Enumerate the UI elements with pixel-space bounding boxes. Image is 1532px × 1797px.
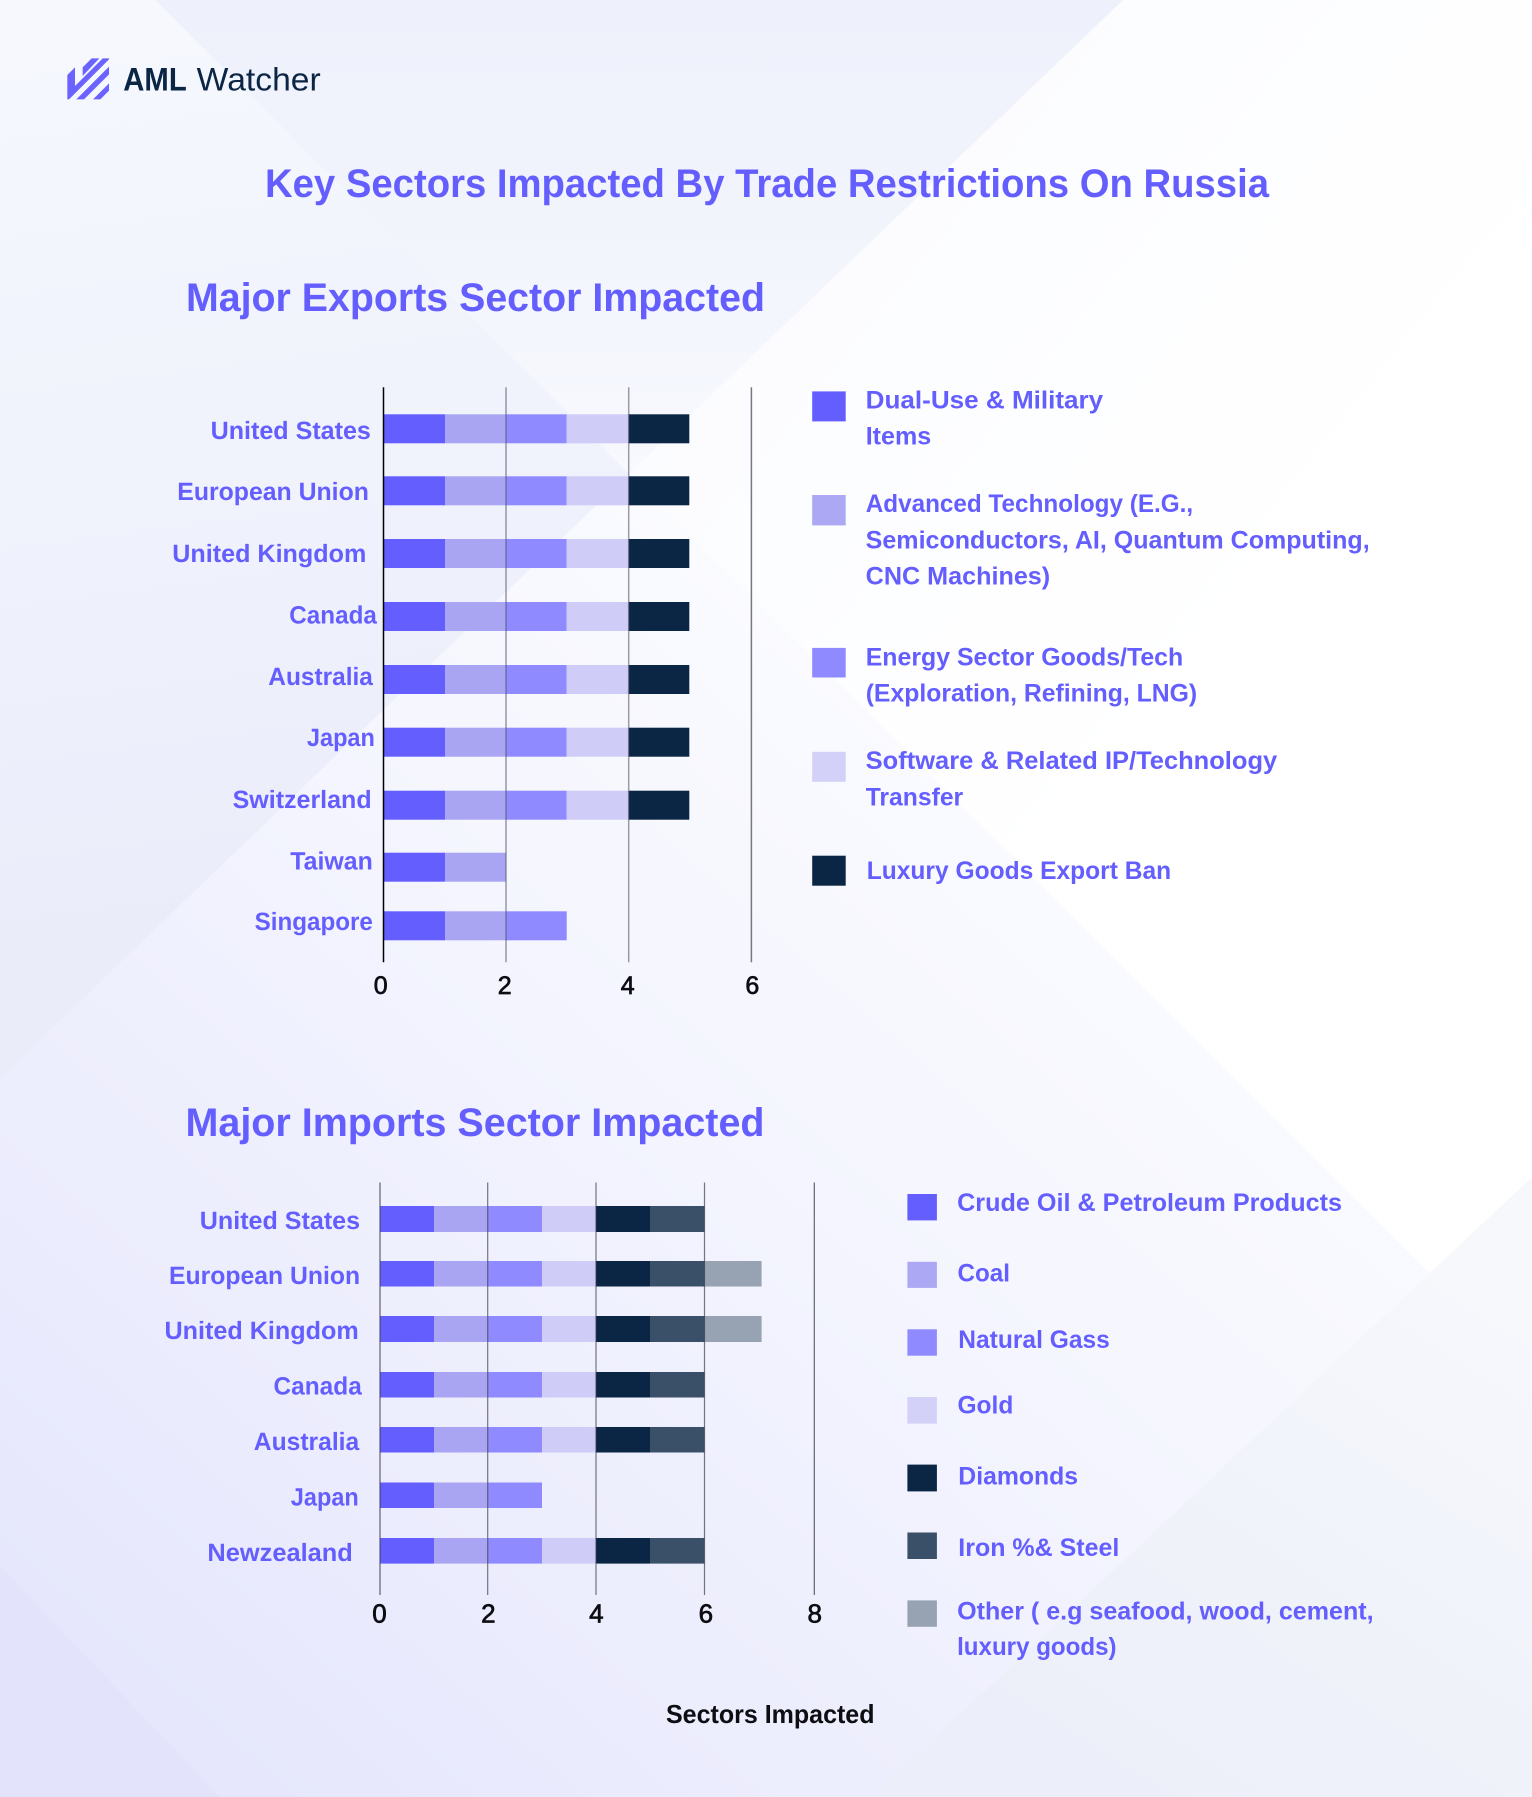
legend: imports: Coal <box>958 1259 1010 1287</box>
country labels: imports: United States <box>200 1207 360 1235</box>
legend: imports: Natural Gass <box>958 1326 1110 1354</box>
logo wordmark: Watcher <box>197 62 321 98</box>
logo: AML Watcher <box>67 58 321 99</box>
title: Key Sectors Impacted By Trade Restrictions On Russia <box>265 162 1270 206</box>
x axis ticks: exports: 0 <box>374 972 388 1000</box>
country labels: exports: United Kingdom <box>172 540 366 568</box>
logo wordmark: AML <box>123 62 187 98</box>
legend: exports: Advanced Technology (E.G., <box>866 490 1193 518</box>
legend: imports: Diamonds <box>958 1462 1078 1490</box>
country labels: exports: Japan <box>307 724 375 752</box>
country labels: exports: Singapore <box>255 908 373 936</box>
legend: exports: (Exploration, Refining, LNG) <box>866 680 1197 708</box>
country labels: imports: United Kingdom <box>164 1317 359 1345</box>
x axis ticks: exports: 2 <box>498 972 512 1000</box>
country labels: exports: United States <box>211 417 371 445</box>
legend: exports: Semiconductors, AI, Quantum Computing, <box>866 526 1370 554</box>
legend: exports: Dual-Use & Military <box>866 387 1103 415</box>
legend: imports: Iron %& Steel <box>958 1534 1119 1562</box>
x axis ticks: imports: 8 <box>807 1598 822 1628</box>
axis title: Sectors Impacted <box>666 1699 874 1729</box>
stacked bars: imports <box>380 1206 762 1564</box>
x axis ticks: imports: 4 <box>589 1598 604 1628</box>
country labels: exports <box>172 417 378 936</box>
legend: imports: Other ( e.g seafood, wood, cement, <box>957 1597 1374 1625</box>
legend: exports: Software & Related IP/Technology <box>866 747 1277 775</box>
legend: exports <box>812 387 1370 886</box>
x axis ticks: imports: 0 <box>372 1598 387 1628</box>
chart: exports stacked bars <box>172 387 759 1000</box>
x axis ticks: exports: 6 <box>745 972 759 1000</box>
heading: imports: Major Imports Sector Impacted <box>186 1101 764 1145</box>
heading: exports: Major Exports Sector Impacted <box>186 276 765 320</box>
legend: imports: Gold <box>958 1391 1013 1419</box>
stacked bars: exports <box>384 414 689 940</box>
icon: striped logo mark <box>67 58 109 99</box>
x axis ticks: imports <box>372 1598 822 1628</box>
country labels: imports: Canada <box>274 1373 363 1401</box>
legend: exports: Items <box>866 423 931 451</box>
x axis ticks: exports <box>374 972 759 1000</box>
country labels: imports: Australia <box>254 1428 360 1456</box>
country labels: exports: Australia <box>268 663 374 691</box>
country labels: exports: European Union <box>177 478 369 506</box>
x axis ticks: imports: 2 <box>481 1598 496 1628</box>
legend: exports: Luxury Goods Export Ban <box>867 857 1171 885</box>
legend: exports: Energy Sector Goods/Tech <box>866 644 1183 672</box>
chart: imports stacked bars <box>164 1182 822 1628</box>
country labels: imports: European Union <box>169 1262 360 1290</box>
legend: exports: CNC Machines) <box>866 562 1050 590</box>
legend: exports: Transfer <box>866 783 963 811</box>
country labels: imports: Japan <box>291 1484 359 1512</box>
country labels: imports <box>164 1207 363 1567</box>
x axis ticks: imports: 6 <box>699 1598 713 1628</box>
country labels: exports: Taiwan <box>290 848 373 876</box>
legend: imports: Crude Oil & Petroleum Products <box>957 1189 1342 1217</box>
country labels: imports: Newzealand <box>207 1539 353 1567</box>
legend: imports <box>907 1189 1374 1661</box>
logo wordmark <box>123 62 321 98</box>
x axis ticks: exports: 4 <box>621 972 635 1000</box>
legend: imports: luxury goods) <box>957 1633 1117 1661</box>
country labels: exports: Switzerland <box>233 786 372 814</box>
country labels: exports: Canada <box>289 602 378 630</box>
